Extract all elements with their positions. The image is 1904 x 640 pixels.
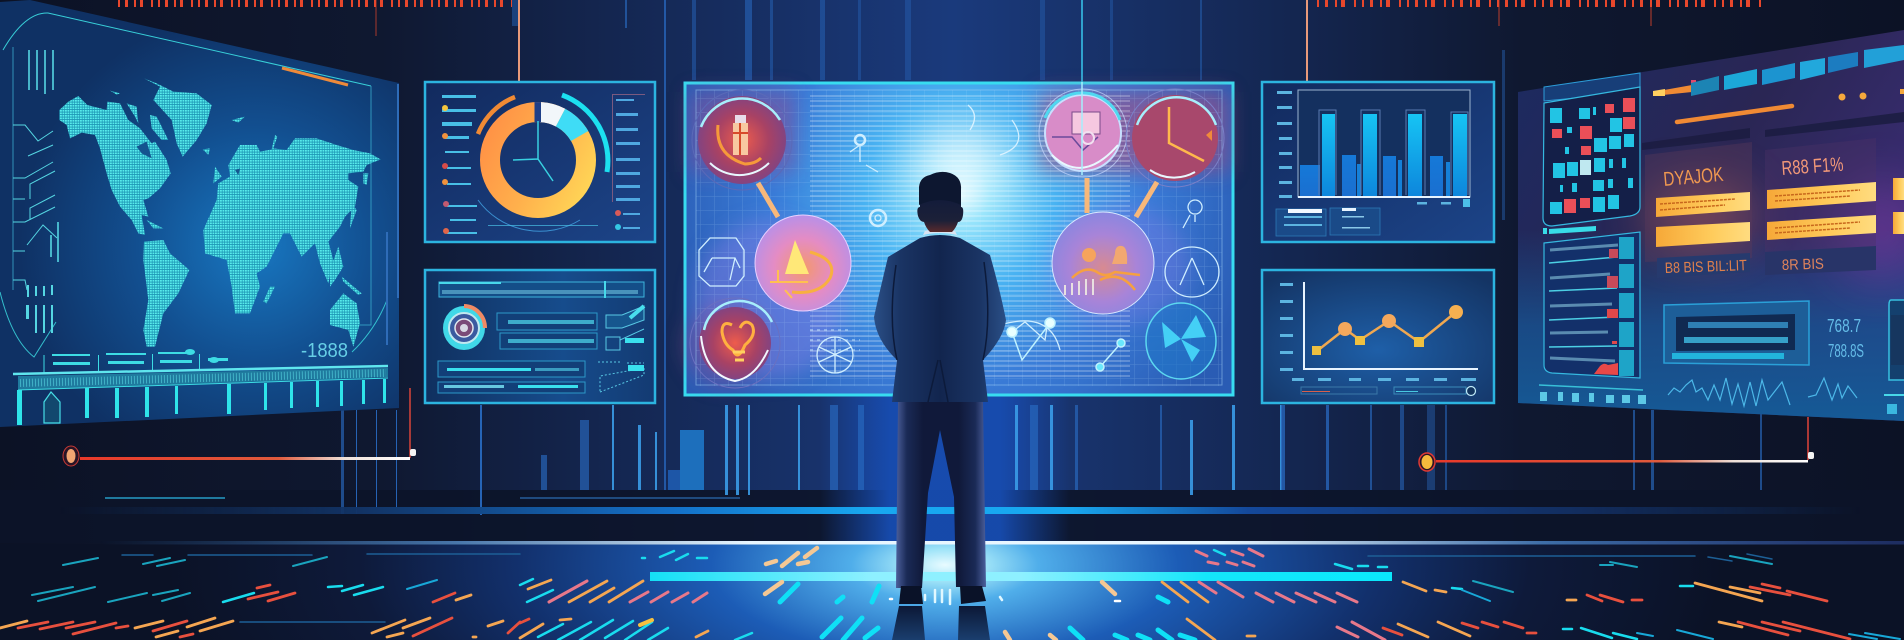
map readout number: -1888 (301, 340, 348, 362)
bars (1300, 110, 1468, 196)
side column: footer icons (1539, 385, 1646, 404)
shoes (899, 586, 986, 604)
orange heading bar (1677, 106, 1792, 122)
x axis labels and sliders (1292, 378, 1476, 396)
map bottom scale bar (13, 366, 388, 425)
donut right legend (612, 94, 645, 230)
screen grid (696, 90, 1222, 386)
background data stripes (341, 0, 1762, 515)
connector line to donut panel (518, 0, 520, 81)
ring badge icon (443, 306, 485, 350)
hair (919, 172, 961, 205)
metric card: R88: R88 F1% (1781, 154, 1844, 180)
floor glowing bar (650, 572, 1392, 581)
metric card: DYAJOK: DYAJOK (1663, 164, 1725, 191)
metric card: R88 (1765, 138, 1904, 262)
map left side readouts (13, 50, 59, 333)
small gauges at right (598, 306, 644, 392)
sparkline charts (1668, 378, 1857, 406)
horizontal glow band (60, 497, 1860, 514)
shirt collar (923, 229, 957, 235)
panel: central main screen (685, 82, 1233, 395)
reflection under feet (892, 606, 990, 640)
trousers (896, 402, 986, 588)
top red tick strip left (118, 0, 512, 36)
floor data dashes (0, 548, 1900, 640)
progress module (1664, 301, 1809, 365)
metric card: B8 BIS: B8 BIS BIL:LIT (1665, 257, 1747, 277)
metric card: B8 BIS (1657, 253, 1750, 278)
gauge circle: tower icon (692, 90, 792, 190)
top progress strip (439, 281, 644, 298)
person: back view analyst (874, 172, 1006, 640)
chart legend boxes (1276, 199, 1470, 236)
y axis labels (1280, 283, 1293, 371)
axis labels (1277, 91, 1292, 198)
floor (0, 544, 1904, 640)
trend data points (1312, 305, 1463, 355)
gauge circle: shield icon (1039, 89, 1127, 177)
line nodes (1007, 318, 1125, 371)
circle: pie icon (1146, 303, 1216, 379)
connector: left callout (63, 388, 416, 466)
jacket (874, 235, 1006, 402)
thin line icons (699, 105, 1219, 373)
side column: list rows (1543, 226, 1640, 378)
panel: bar chart (1262, 82, 1494, 242)
connector line to bar chart panel (1306, 0, 1308, 81)
central glow (918, 135, 1002, 195)
panel: progress rows (425, 270, 655, 403)
pointer bars (758, 178, 1157, 217)
panel: line chart (1262, 270, 1494, 403)
connector line to central screen (1081, 0, 1083, 82)
accent bar on map panel (282, 68, 348, 85)
chart frame (1298, 90, 1470, 197)
panel: right control dashboard (1518, 30, 1904, 421)
data rows (438, 313, 597, 393)
donut left legend (442, 95, 598, 234)
screen inner frame (696, 90, 1222, 385)
floor horizon line (100, 541, 1904, 544)
jacket seams (892, 262, 988, 402)
dark header tabs (1642, 112, 1904, 150)
circle: bulb icon (690, 298, 780, 388)
edge card (1884, 300, 1904, 414)
world map dots (59, 78, 381, 347)
panel: donut chart (425, 82, 655, 242)
connector: right callout (1419, 417, 1814, 471)
panel: world map (0, 0, 399, 427)
top tab strip (1653, 45, 1904, 100)
top red tick strip right (1317, 0, 1767, 26)
trend line (1317, 312, 1456, 351)
readout numbers: 768.7 (1827, 316, 1861, 336)
chart axes (1304, 282, 1478, 369)
neck and head (917, 200, 963, 232)
vertical pointer over screen (1081, 82, 1083, 175)
donut ring (478, 95, 608, 231)
screen light streaks (810, 95, 1130, 380)
circle: people icon (1052, 212, 1154, 314)
metric card: 8R BIS: 8R BIS (1782, 256, 1824, 274)
map bottom data rows (44, 349, 228, 373)
side column: icon grid (1543, 73, 1640, 226)
circle: triangle icon (755, 215, 851, 311)
metric card: 8R BIS (1765, 246, 1876, 275)
gauge circle: clock icon (1126, 89, 1224, 187)
left and right purple wash (685, 92, 1228, 385)
metric card: DYAJOK (1645, 142, 1752, 262)
readout number second: 788.8S (1828, 341, 1864, 361)
